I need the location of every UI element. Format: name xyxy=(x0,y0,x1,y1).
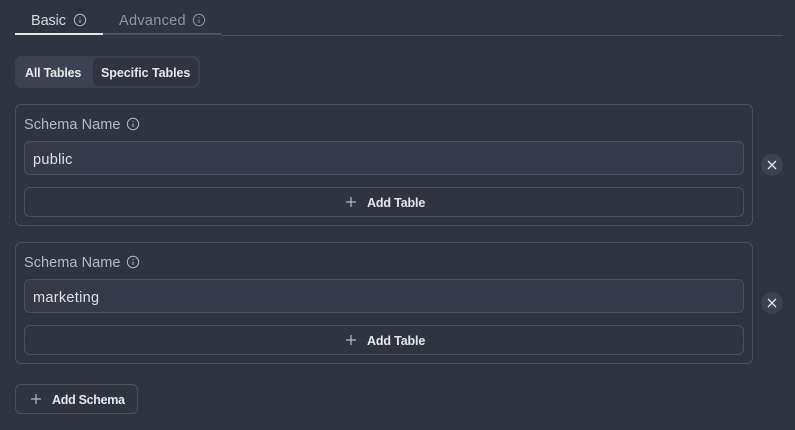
button: Add Schema xyxy=(15,384,138,414)
option: Specific Tables selected xyxy=(93,58,198,86)
input: marketing xyxy=(24,279,744,313)
button: Add Table: Add Table xyxy=(367,334,425,348)
label: Schema Name: Schema Name xyxy=(24,255,120,271)
icon: info xyxy=(126,118,140,130)
button: Add Table xyxy=(24,325,744,355)
input: public: public xyxy=(33,152,73,168)
button: Add Table: Add Table xyxy=(367,196,425,210)
option: All Tables: All Tables xyxy=(25,66,81,80)
icon: Basic info xyxy=(74,14,86,26)
tab: Advanced: Advanced xyxy=(119,13,186,29)
label: Schema Name: Schema Name xyxy=(24,117,120,133)
segmented control xyxy=(15,56,200,88)
input: public xyxy=(24,141,744,175)
icon: plus xyxy=(346,197,356,207)
button: Add Schema: Add Schema xyxy=(52,393,125,407)
option: Specific Tables selected: Specific Tables xyxy=(101,66,190,80)
button: remove schema public xyxy=(761,154,783,176)
button: Add Table xyxy=(24,187,744,217)
active tab underline xyxy=(15,33,103,35)
icon: info xyxy=(126,256,140,268)
input: marketing: marketing xyxy=(33,290,99,306)
tab rule xyxy=(222,35,783,36)
icon: plus xyxy=(31,394,41,404)
tab: Basic: Basic xyxy=(31,13,66,29)
panel: schema public xyxy=(15,104,753,226)
tabs xyxy=(15,13,783,36)
button: remove schema marketing xyxy=(761,292,783,314)
inactive tab underline xyxy=(103,33,222,35)
icon: Advanced info xyxy=(192,14,206,26)
icon: plus xyxy=(346,335,356,345)
panel: schema marketing xyxy=(15,242,753,364)
